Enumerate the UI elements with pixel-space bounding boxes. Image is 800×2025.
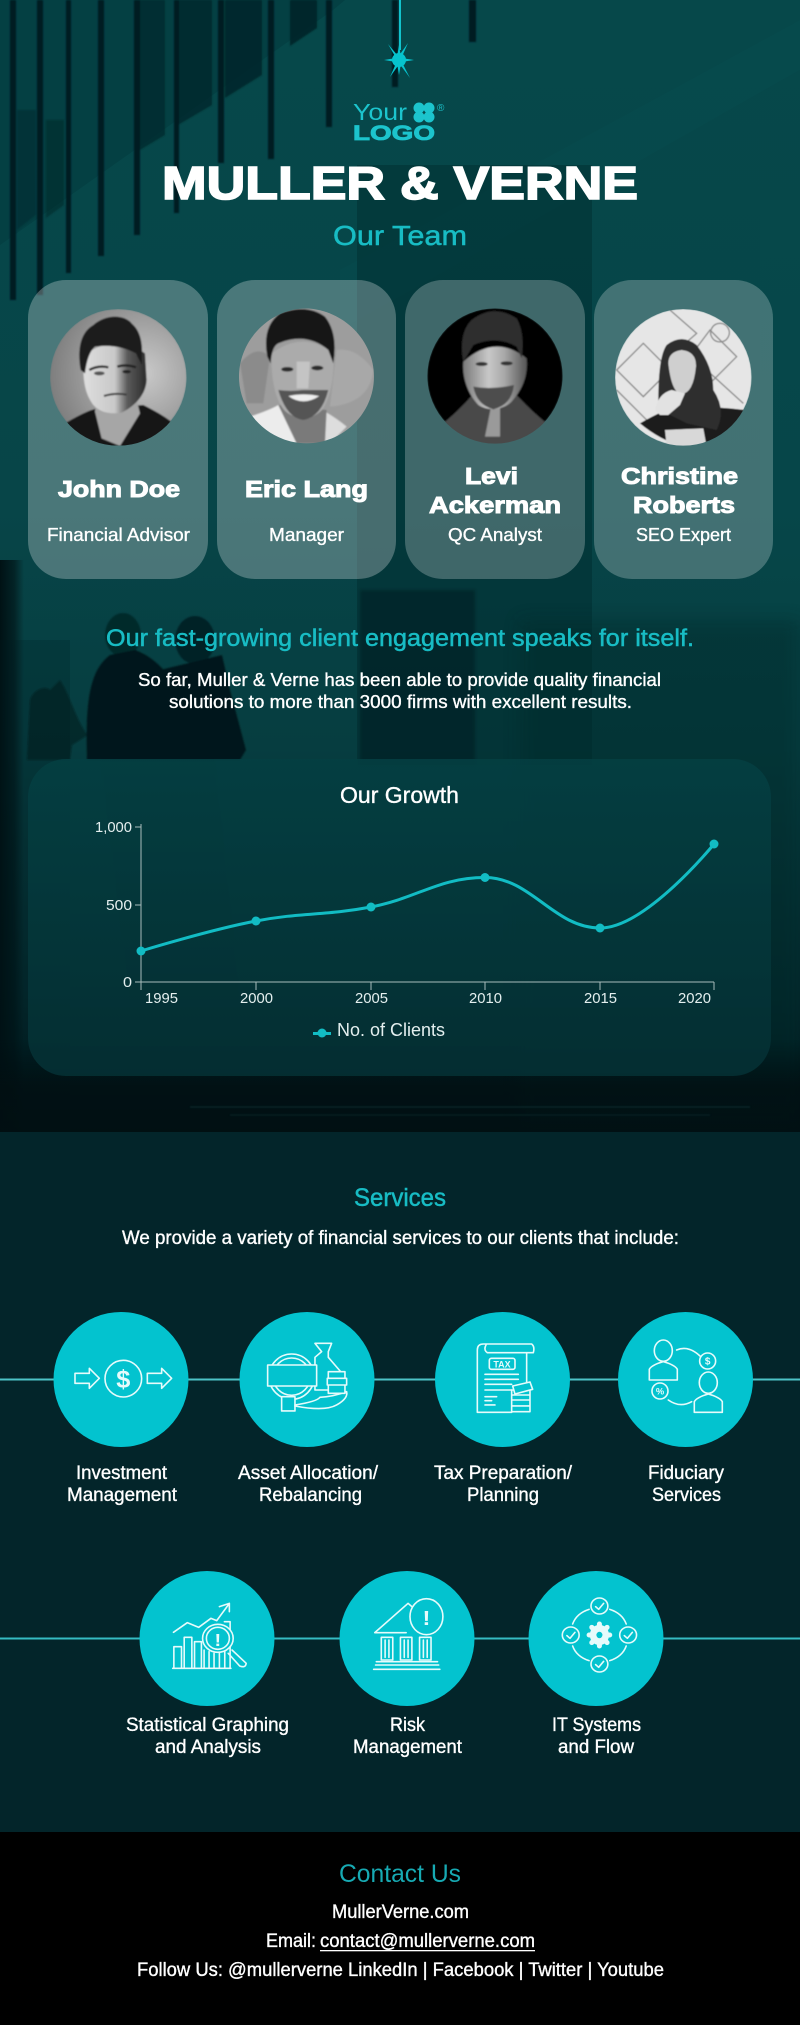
label: and Analysis (155, 1737, 261, 1758)
label: Risk (390, 1715, 425, 1736)
line chart: 2010 (469, 990, 502, 1007)
icon: tax document (477, 1344, 534, 1412)
line chart: 1,000 (95, 819, 132, 836)
text block: intro: So far, Muller & Verne has been able to provide quality financial (138, 670, 661, 690)
service: tax preparation (434, 1312, 573, 1506)
panel: team card Levi Ackerman (405, 280, 585, 579)
role: Financial Advisor (47, 525, 190, 545)
icon: chart with magnifier: ! (215, 1630, 221, 1650)
background photo (0, 0, 800, 1132)
photo: Eric Lang (237, 307, 377, 447)
icon: gear and checks (562, 1598, 637, 1672)
heading: contact us: Contact Us (339, 1860, 461, 1888)
line chart: 1995 (145, 990, 178, 1007)
label (126, 1715, 289, 1758)
heading: services: Services (354, 1184, 446, 1212)
label (67, 1463, 178, 1506)
text: contact details: Follow Us: @mullerverne LinkedIn | Facebook | Twitter | Youtube (137, 1960, 664, 1981)
icon: dollar arrows (75, 1360, 172, 1397)
photo: John Doe (50, 309, 187, 450)
heading: client engagement: Our fast-growing client engagement speaks for itself. (106, 625, 694, 652)
name line two: Ackerman (429, 492, 561, 518)
name line two: Roberts (633, 492, 735, 518)
icon: tax document: TAX (493, 1359, 511, 1369)
text: contact details (137, 1902, 664, 1981)
logo: Your (353, 99, 407, 125)
panel: team card John Doe (28, 280, 208, 579)
service: asset allocation (238, 1312, 379, 1506)
chart legend: No. of Clients (337, 1020, 445, 1040)
icon: star (384, 43, 414, 78)
label: and Flow (558, 1737, 634, 1758)
service: statistical graphing (126, 1571, 289, 1758)
panel: growth chart (28, 759, 771, 1076)
label: Investment (76, 1463, 168, 1484)
label: IT Systems (552, 1715, 641, 1736)
line chart: 0 (123, 974, 132, 991)
photo: Levi Ackerman (427, 308, 563, 447)
name: Levi (465, 463, 518, 489)
logo: ® (437, 103, 445, 114)
logo: LOGO (353, 122, 435, 145)
service: fiduciary services (618, 1312, 753, 1506)
title: MULLER & VERNE (162, 157, 638, 209)
line chart: 2005 (355, 990, 388, 1007)
icon: magnifier and money bag (268, 1343, 347, 1411)
label (648, 1463, 724, 1506)
icon: chart with magnifier (173, 1603, 246, 1668)
label: Planning (467, 1485, 539, 1506)
role: Manager (269, 525, 344, 545)
panel: footer (0, 1832, 800, 2025)
icon: logo clover (414, 102, 434, 122)
text: contact details: Email: (266, 1931, 316, 1952)
photo: Christine Roberts (615, 309, 752, 447)
label: Statistical Graphing (126, 1715, 289, 1736)
label: Asset Allocation/ (238, 1463, 379, 1484)
name: Eric Lang (245, 476, 368, 502)
service: IT systems (528, 1571, 664, 1758)
heading: our team: Our Team (333, 220, 467, 251)
role: QC Analyst (448, 525, 542, 545)
text: contact details: contact@mullerverne.com (320, 1931, 535, 1952)
service: investment management (54, 1312, 188, 1506)
panel: services background (0, 1132, 800, 1832)
label: Rebalancing (259, 1485, 362, 1506)
text block: intro: solutions to more than 3000 firms with excellent results. (169, 692, 632, 712)
label: Services (652, 1485, 721, 1506)
icon: people exchange: % (656, 1387, 665, 1397)
icon: people exchange (649, 1340, 722, 1412)
text: services intro: We provide a variety of financial services to our clients that include: (122, 1228, 679, 1249)
line chart: 2015 (584, 990, 617, 1007)
panel: team card Christine Roberts (594, 280, 773, 579)
silhouettes of people (27, 613, 246, 1000)
label: Tax Preparation/ (434, 1463, 573, 1484)
line chart: 500 (106, 897, 132, 914)
label: Management (67, 1485, 178, 1506)
text: contact details: MullerVerne.com (332, 1902, 469, 1923)
label (353, 1715, 463, 1758)
icon: bank with alert (374, 1599, 443, 1669)
top connector line (399, 0, 401, 50)
icon: bank with alert: ! (422, 1606, 430, 1630)
line chart (95, 819, 718, 1007)
label (238, 1463, 379, 1506)
label: Fiduciary (648, 1463, 724, 1484)
text block: intro (138, 670, 661, 712)
label: Management (353, 1737, 463, 1758)
chart title: Our Growth (340, 782, 459, 808)
line chart: 2000 (240, 990, 273, 1007)
role: SEO Expert (636, 525, 731, 545)
label (434, 1463, 573, 1506)
label (552, 1715, 641, 1758)
logo (353, 99, 445, 145)
line chart: 2020 (678, 990, 711, 1007)
icon: people exchange: $ (705, 1357, 711, 1368)
service: risk management (340, 1571, 474, 1758)
name: John Doe (58, 476, 180, 502)
panel: team card Eric Lang (217, 280, 396, 579)
name: Christine (621, 463, 738, 489)
icon: dollar arrows: $ (116, 1365, 130, 1393)
